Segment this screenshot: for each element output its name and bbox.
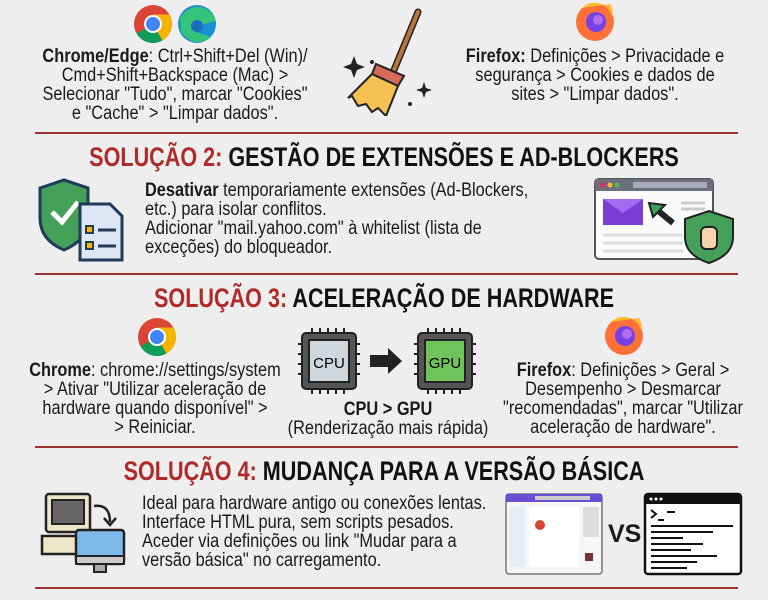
text: chrome/edge clear data: Cmd+Shift+Backspace (Mac) >	[62, 65, 288, 86]
icon: cpu to gpu: GPU	[429, 355, 461, 372]
text: chrome hardware acceleration: hardware quando disponível" >	[42, 398, 268, 419]
icon: old computer to new	[40, 492, 126, 573]
heading: solução 3: SOLUÇÃO 3: ACELERAÇÃO DE HARDWARE	[154, 283, 614, 313]
text: firefox hardware acceleration: "recomendadas", marcar "Utilizar	[503, 398, 743, 419]
heading: solução 4: SOLUÇÃO 4: MUDANÇA PARA A VERSÃO BÁSICA	[124, 456, 644, 486]
icon: cpu to gpu: CPU	[313, 355, 345, 372]
icon: cpu to gpu	[298, 328, 476, 394]
text: extensions	[145, 180, 528, 258]
text: chrome/edge clear data: Chrome/Edge: Ctrl+Shift+Del (Win)/	[42, 46, 308, 67]
text: basic version: Aceder via definições ou link "Mudar para a	[142, 531, 457, 552]
text: chrome hardware acceleration: > Reiniciar.	[114, 417, 196, 438]
icon: full interface screenshot	[505, 493, 603, 575]
icon: terminal basic interface	[644, 492, 742, 576]
icon: broom	[343, 8, 432, 116]
text: cpu > gpu caption	[288, 399, 488, 439]
text: basic version: Interface HTML pura, sem scripts pesados.	[142, 512, 454, 533]
text: extensions: Adicionar "mail.yahoo.com" à whitelist (lista de	[145, 218, 482, 239]
heading: solução 2: SOLUÇÃO 2: GESTÃO DE EXTENSÕES E AD-BLOCKERS	[89, 142, 679, 172]
text: firefox hardware acceleration: aceleração de hardware".	[530, 417, 716, 438]
text: extensions: Desativar temporariamente extensões (Ad-Blockers,	[145, 180, 528, 201]
text: firefox hardware acceleration: Desempenho > Desmarcar	[525, 379, 721, 400]
text: cpu > gpu caption: (Renderização mais rápida)	[288, 418, 488, 439]
text: firefox clear data: segurança > Cookies e dados de	[475, 65, 715, 86]
text: basic version	[142, 493, 486, 571]
text: firefox hardware acceleration	[503, 360, 743, 438]
icon: shield and checklist	[38, 178, 124, 262]
text: basic version: versão básica" no carregamento.	[142, 550, 381, 571]
text: firefox clear data	[466, 46, 724, 105]
text: chrome/edge clear data: Selecionar "Tudo", marcar "Cookies"	[42, 84, 308, 105]
text: chrome/edge clear data	[42, 46, 308, 124]
text: chrome/edge clear data: e "Cache" > "Limpar dados".	[72, 103, 278, 124]
icon: firefox	[605, 316, 643, 355]
text: vs: VS	[608, 520, 641, 548]
icon: chrome	[138, 318, 176, 356]
text: chrome hardware acceleration: Chrome: chrome://settings/system	[29, 360, 281, 381]
text: extensions: exceções) do bloqueador.	[145, 237, 332, 258]
icon: browser with blocked mail	[594, 178, 734, 264]
text: firefox hardware acceleration: Firefox: Definições > Geral >	[517, 360, 729, 381]
icon: firefox	[576, 2, 614, 41]
icon: chrome and edge	[134, 5, 216, 43]
text: extensions: etc.) para isolar conflitos.	[145, 199, 327, 220]
text: chrome hardware acceleration: > Ativar "Utilizar aceleração de	[44, 379, 266, 400]
text: firefox clear data: sites > "Limpar dados".	[511, 84, 679, 105]
text: firefox clear data: Firefox: Definições > Privacidade e	[466, 46, 724, 67]
text: basic version: Ideal para hardware antigo ou conexões lentas.	[142, 493, 486, 514]
text: chrome hardware acceleration	[29, 360, 281, 438]
text: cpu > gpu caption: CPU > GPU	[344, 399, 432, 420]
